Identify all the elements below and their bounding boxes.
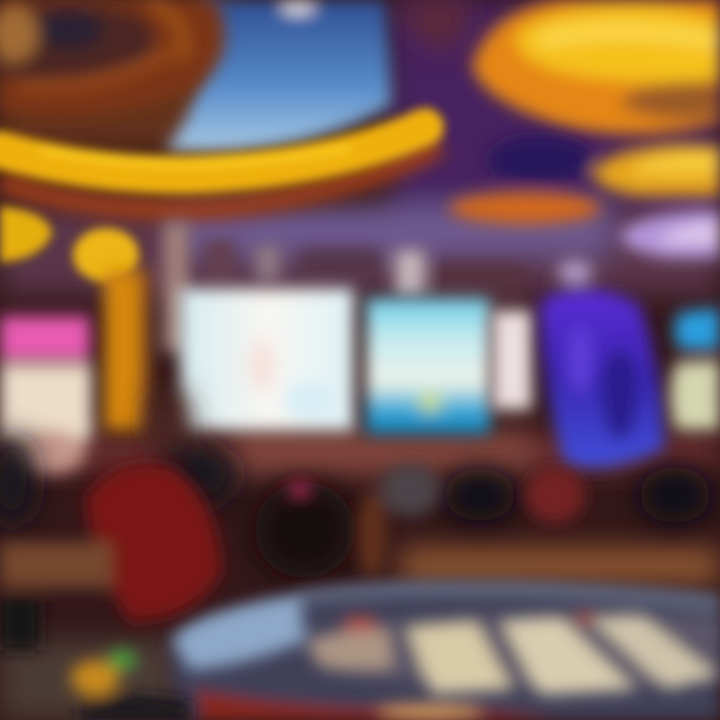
pale side screen (492, 310, 532, 410)
lower amber glow (400, 548, 720, 584)
crowd silhouettes (0, 390, 711, 578)
roulette table (170, 585, 720, 720)
colourful chips (71, 649, 190, 720)
white screen (180, 288, 354, 431)
upper screen band (205, 240, 525, 297)
left yellow lamps (0, 206, 139, 282)
chandelier bowl (472, 0, 720, 134)
blue ceiling opening (165, 0, 392, 152)
red chair and seated figures (0, 463, 585, 650)
right-hand screens (670, 308, 720, 430)
top-right chandelier (400, 0, 470, 50)
left pink and cream screens (0, 316, 92, 474)
table surface panels (172, 588, 720, 719)
arch highlight (0, 127, 425, 175)
top-left ornamental rings (0, 0, 225, 115)
cyan screen (366, 298, 490, 434)
orange column (104, 222, 189, 430)
purple-blue tower (540, 260, 664, 468)
table rim (170, 585, 720, 720)
curved yellow arch (0, 145, 440, 210)
lower chandelier tiers (449, 136, 720, 258)
